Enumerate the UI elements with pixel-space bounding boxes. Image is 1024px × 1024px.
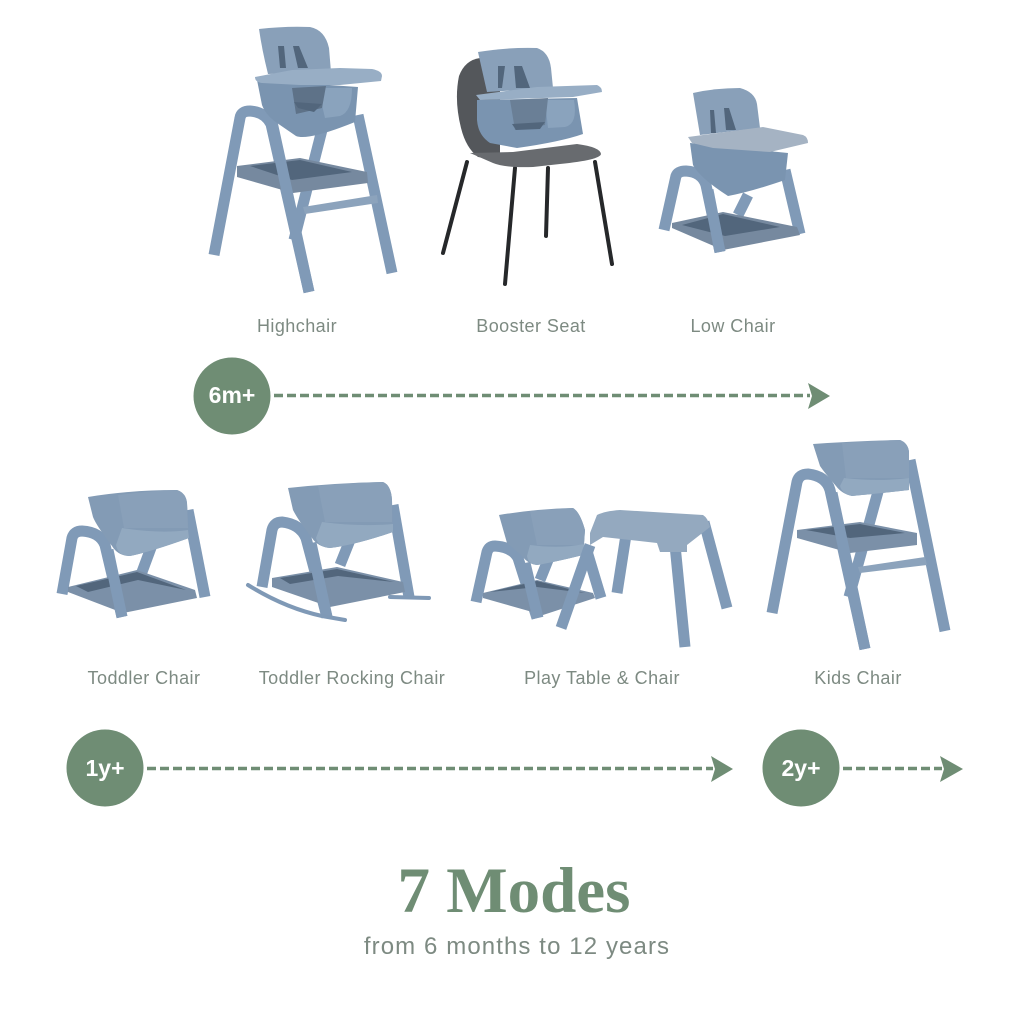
arrow: 6m+ timeline <box>274 383 830 409</box>
label: Highchair: Highchair <box>257 316 337 336</box>
age badge: 1y+ <box>66 730 144 806</box>
label: Booster Seat: Booster Seat <box>476 316 586 336</box>
arrow: 1y+ timeline <box>147 756 733 782</box>
age badge: 6m+ <box>194 358 270 434</box>
title: 7 Modes <box>398 855 630 927</box>
chair: booster seat on dining chair <box>443 48 612 284</box>
label: Toddler Rocking Chair: Toddler Rocking Chair <box>259 668 445 688</box>
label: Low Chair: Low Chair <box>690 316 776 336</box>
age badge: 1y+: 1y+ <box>85 755 125 781</box>
chair: kids chair <box>772 440 945 649</box>
age badge: 6m+: 6m+ <box>209 382 255 408</box>
chair: play table and chair <box>476 508 727 647</box>
age badge: 2y+: 2y+ <box>781 755 821 781</box>
label: Kids Chair: Kids Chair <box>814 668 902 688</box>
chair: toddler chair <box>62 490 205 617</box>
label: Toddler Chair: Toddler Chair <box>88 668 200 688</box>
age badge: 2y+ <box>762 730 840 806</box>
chair: toddler rocking chair <box>248 482 429 620</box>
chair: low chair <box>664 88 808 252</box>
label: Play Table & Chair: Play Table & Chair <box>524 668 680 688</box>
arrow: 2y+ timeline <box>843 756 963 782</box>
subtitle: from 6 months to 12 years <box>364 933 670 960</box>
chair: highchair <box>214 27 392 292</box>
